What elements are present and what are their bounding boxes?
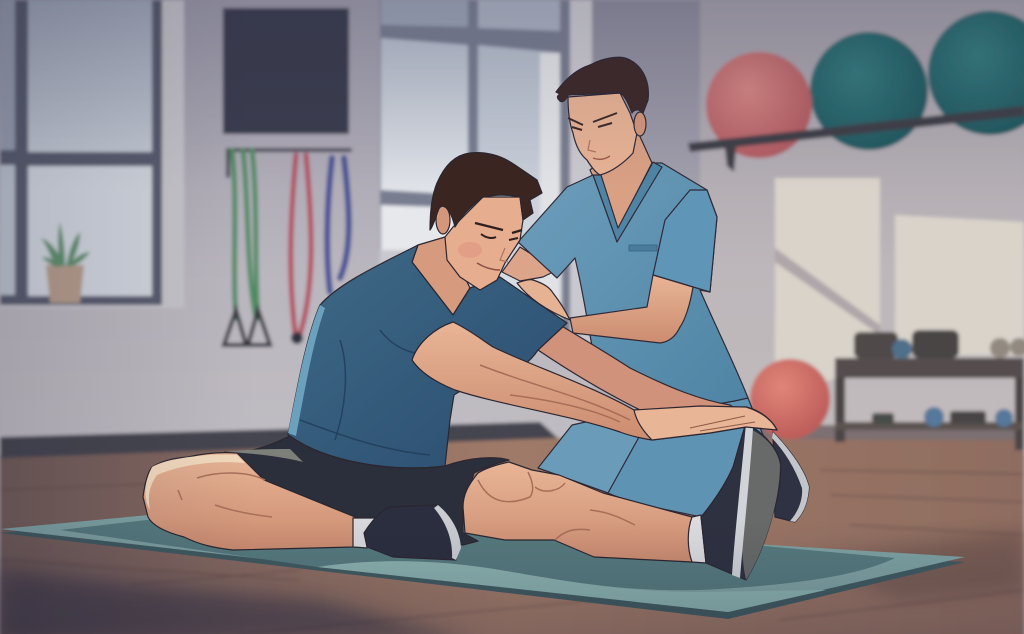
mat shadow area [60,515,895,590]
therapist sleeve [653,190,717,292]
centre window [380,0,592,345]
therapist face features [568,113,617,159]
therapist neck [590,130,652,230]
patient ear [436,206,450,234]
therapist scrubs torso [518,163,748,407]
therapist hair [556,57,648,113]
patient left leg [143,453,355,550]
patient face features [475,223,522,270]
therapist pocket [629,245,657,251]
patient near shoe [701,423,781,580]
exercise mat [0,513,965,619]
left window [0,0,184,308]
floor shadow [0,570,470,634]
patient far shoe trim [772,432,809,522]
patient hair [430,153,542,230]
icon: resistance bands on wall rack [224,150,350,345]
therapist ear [634,112,646,136]
patient left shoe [364,505,460,560]
therapist face [568,93,637,175]
patient far shoe [773,432,809,522]
icon: plant [41,222,90,303]
patient shirt folds [300,330,445,455]
floor [0,438,1024,634]
therapist forearm [570,275,693,343]
therapist rear arm [502,247,557,281]
patient shirt rim light [288,305,325,436]
patient left leg folds [178,473,272,517]
patient shorts [225,436,509,545]
patient near shoe sole edge [732,423,753,578]
patient cheek [458,242,482,258]
patient right leg [463,462,692,562]
mat lit band [317,561,826,612]
equipment shelf [835,330,1024,450]
wall column [592,0,700,450]
therapist far thigh [608,398,765,517]
figure: therapist [502,57,765,517]
baseboard [0,422,560,460]
patient right sock [688,515,706,563]
patient hand on foot [634,406,777,440]
patient finger lines [690,416,755,431]
patient shorts highlight [225,449,303,462]
patient left shoe trim [434,505,461,560]
wall [0,0,1024,455]
patient face [445,197,523,290]
therapist v neck collar [593,162,662,242]
therapist hand [517,280,570,320]
patient left sock [353,518,378,548]
patient rear arm [538,325,740,412]
floorboards [0,470,1024,634]
patient neck [412,237,470,315]
patient left leg highlights [145,455,245,510]
wall panel [223,8,349,134]
patient front arm [412,322,777,440]
light patches [775,178,1024,400]
patient shirt [288,245,567,468]
figure: patient [143,153,809,580]
patient knee lines [478,472,635,540]
red ball on floor [750,359,830,439]
patient arm muscle lines [480,365,630,422]
therapist near thigh [538,410,690,493]
patient near shoe sole [742,428,780,580]
icon: exercise balls on rack [688,11,1024,172]
